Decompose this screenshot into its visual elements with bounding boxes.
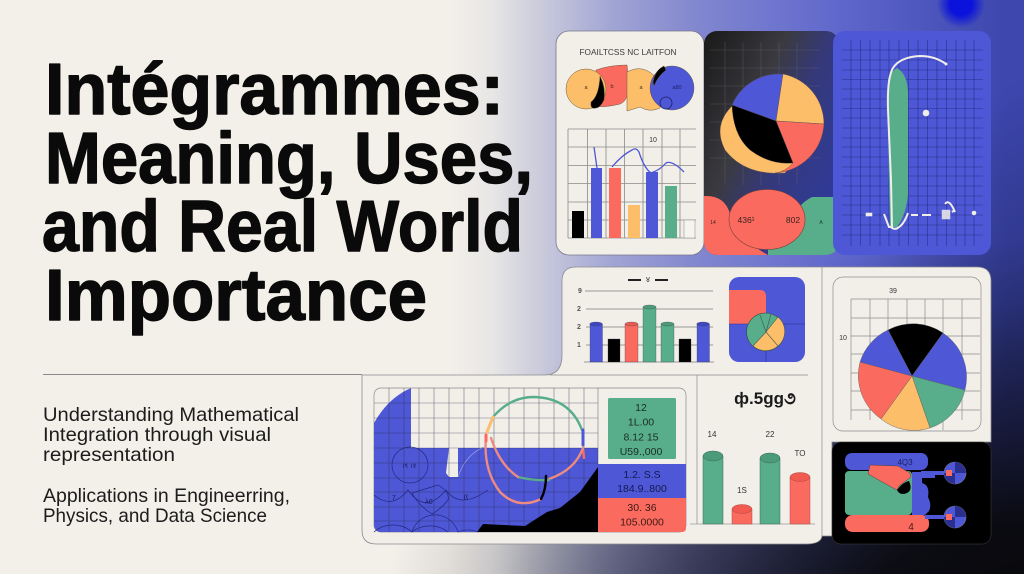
bar labels: TO (795, 449, 805, 458)
bottom blobs: 436¹ (737, 215, 755, 225)
ring arcs (486, 397, 584, 503)
axis labels: 9 (578, 288, 582, 295)
data table: green: 1L.00 (628, 416, 654, 428)
bottom blobs: 14 (710, 220, 716, 226)
circle sketches (374, 447, 488, 532)
title: Intégrammes: (45, 50, 504, 130)
small bar chart (577, 275, 714, 362)
venn labels: b (610, 84, 614, 90)
integral annotations (866, 63, 976, 227)
panel: grid chart with blue area (374, 388, 686, 532)
axis labels: 1 (577, 342, 581, 349)
venn labels: a80 (672, 85, 682, 91)
blue area (374, 388, 598, 532)
bottom blobs: 802 (786, 215, 800, 225)
grid lines (374, 388, 598, 532)
bar labels: 14 (708, 430, 717, 439)
panel: venn and bar chart card (556, 31, 704, 255)
title (42, 50, 533, 336)
bottom blobs: A (819, 220, 823, 226)
pie chart (858, 324, 967, 430)
black area (477, 467, 598, 532)
title: and Real World (42, 187, 523, 267)
sketch labels: λ0 (425, 499, 433, 506)
venn labels: a (639, 85, 643, 91)
left horizontal rule (43, 374, 362, 376)
bars (703, 451, 810, 524)
data table: green: U59.,000 (620, 446, 662, 458)
pie labels (839, 288, 897, 342)
sketch labels: ß (464, 495, 468, 502)
faint grid (710, 42, 820, 185)
blue connector (912, 472, 935, 515)
pie labels: 10 (839, 335, 847, 342)
venn labels: a (584, 85, 588, 91)
subtitle text block: Physics, and Data Science (43, 505, 267, 527)
bar chart with grid: 10 (649, 137, 657, 144)
chart heading: ф.5gg૭ (734, 389, 796, 408)
sketch labels: 7 (392, 495, 396, 502)
pie chart with crescent (720, 74, 824, 173)
bar labels: 22 (766, 430, 775, 439)
panel: black schematic card: 4Q3 (897, 458, 913, 467)
venn diagram (566, 65, 694, 111)
bar labels: 1S (737, 486, 747, 495)
subtitle text block: Applications in Engineerring, (43, 485, 290, 507)
chart heading: ४ (646, 275, 650, 284)
venn labels (584, 84, 682, 91)
dial top (921, 462, 966, 484)
panel: large lower container (362, 267, 991, 544)
dividers (550, 267, 822, 536)
data table: red: 30. 36 (627, 502, 657, 514)
pie labels: 39 (889, 288, 897, 295)
subtitle text block (43, 404, 299, 527)
sketch labels (392, 463, 468, 506)
data table: blue (598, 464, 686, 498)
title: Meaning, Uses, (45, 119, 533, 199)
dial bottom (925, 506, 966, 528)
bar chart with grid (568, 129, 696, 238)
grid (851, 299, 980, 430)
panel: blue integral card (833, 31, 991, 255)
bottom blobs (704, 190, 839, 255)
subtitle text block: Integration through visual (43, 424, 271, 446)
subtitle text block: Understanding Mathematical (43, 404, 299, 426)
card heading: FOAILTCSS NC LAITFON (580, 47, 676, 57)
panel: dark pie card (704, 31, 839, 255)
title: Importance (45, 256, 427, 336)
axis labels: 2 (577, 324, 581, 331)
bar labels (708, 430, 805, 495)
integral curve (888, 56, 946, 229)
grid (842, 40, 983, 246)
data table: red (598, 498, 686, 532)
data table: green: 12 (635, 402, 647, 414)
green block (845, 471, 912, 515)
data table: green: 8.12 15 (623, 432, 659, 444)
axis labels (577, 288, 582, 349)
data table: green (608, 398, 676, 459)
subtitle text block: representation (43, 444, 175, 466)
red polygon (868, 465, 911, 490)
panel: black schematic card (832, 442, 991, 544)
blue pill (845, 453, 928, 470)
icon card: blue square with pie (729, 277, 805, 362)
axis labels: 2 (577, 306, 581, 313)
sketch labels: ।९ ।१ (402, 463, 416, 470)
data table: blue: 1.2. S.S (623, 469, 661, 481)
red pill (845, 515, 929, 532)
panel: black schematic card: 4 (908, 522, 914, 533)
data table: blue: 184.9..800 (617, 483, 667, 495)
green area under curve (888, 68, 908, 227)
panel: outlined pie chart (833, 277, 981, 431)
data table: red: 105.0000 (620, 516, 664, 528)
cylinder bar chart (690, 389, 815, 524)
